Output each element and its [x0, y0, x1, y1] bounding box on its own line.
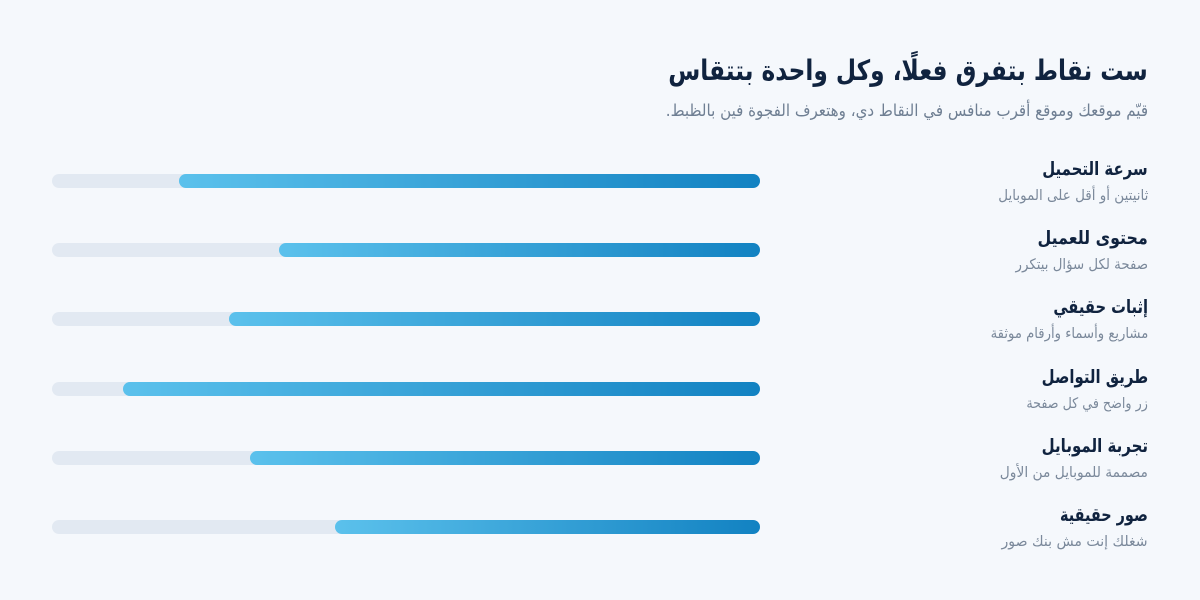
bar: loading speed [52, 174, 760, 188]
description: loading speed: ثانيتين أو أقل على الموبايل [998, 188, 1148, 204]
bar: real photos [52, 520, 760, 534]
bar: customer content [52, 243, 760, 257]
bar: real proof [52, 312, 760, 326]
title: ست نقاط بتفرق فعلًا، وكل واحدة بتتقاس [668, 54, 1148, 87]
label: mobile experience: تجربة الموبايل [1042, 436, 1148, 457]
bar: mobile experience [52, 451, 760, 465]
label: real proof: إثبات حقيقي [1053, 297, 1148, 318]
label: loading speed: سرعة التحميل [1043, 159, 1148, 180]
row: real proof [52, 297, 1148, 342]
description: contact path: زر واضح في كل صفحة [1027, 396, 1148, 412]
description: customer content: صفحة لكل سؤال بيتكرر [1015, 257, 1148, 273]
row: loading speed [52, 159, 1148, 204]
row: customer content [52, 228, 1148, 273]
description: real photos: شغلك إنت مش بنك صور [1002, 534, 1148, 550]
row: mobile experience [52, 436, 1148, 481]
bar: contact path [52, 382, 760, 396]
row: real photos [52, 505, 1148, 550]
row: contact path [52, 367, 1148, 412]
label: customer content: محتوى للعميل [1038, 228, 1148, 249]
description: mobile experience: مصممة للموبايل من الأول [1000, 465, 1148, 481]
label: real photos: صور حقيقية [1060, 505, 1148, 526]
subtitle: قيّم موقعك وموقع أقرب منافس في النقاط دي، وهتعرف الفجوة فين بالظبط. [666, 101, 1148, 120]
label: contact path: طريق التواصل [1041, 367, 1148, 388]
description: real proof: مشاريع وأسماء وأرقام موثقة [990, 326, 1148, 342]
